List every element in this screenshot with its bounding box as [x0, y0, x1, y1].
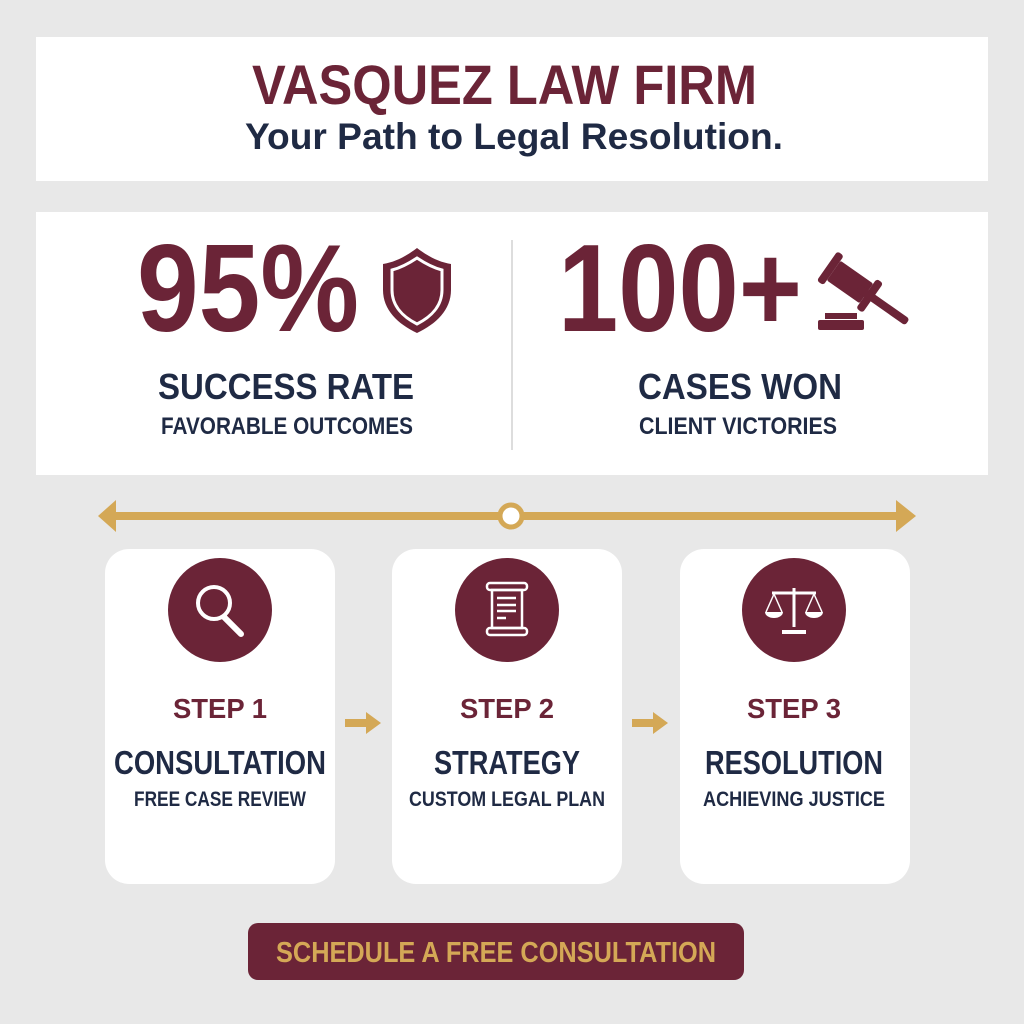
icon: gavel	[817, 251, 918, 337]
card: step 1: STEP 1	[173, 693, 267, 724]
card: step 2: STEP 2	[460, 693, 554, 724]
stat: 100+ cases won	[558, 220, 918, 440]
card: step 1	[105, 549, 335, 884]
arrow: step 2 to 3	[632, 712, 668, 734]
icon: scales	[742, 558, 846, 662]
stat: 100+ cases won: CLIENT VICTORIES	[639, 413, 837, 440]
icon: scroll	[455, 558, 559, 662]
icon: magnifier	[168, 558, 272, 662]
card: step 2: CUSTOM LEGAL PLAN	[409, 788, 605, 811]
icon: shield	[383, 248, 451, 333]
card: step 3	[680, 549, 910, 884]
stats panel	[36, 212, 988, 475]
stat: 95% success rate: FAVORABLE OUTCOMES	[161, 413, 413, 440]
button: CTA: SCHEDULE A FREE CONSULTATION	[276, 937, 716, 969]
stat: 95% success rate	[137, 220, 451, 440]
stat: 100+ cases won: 100+	[558, 220, 802, 358]
card: step 3: ACHIEVING JUSTICE	[703, 788, 885, 811]
subtitle: Your Path to Legal Resolution.	[245, 116, 783, 157]
card: step 2	[392, 549, 622, 884]
header panel	[36, 37, 988, 181]
button: CTA	[248, 923, 744, 980]
arrow: step 1 to 2	[345, 712, 381, 734]
card: step 3: STEP 3	[747, 693, 841, 724]
card: step 3: RESOLUTION	[705, 744, 883, 781]
stat: 95% success rate: 95%	[137, 220, 359, 358]
card: step 2: STRATEGY	[434, 744, 580, 781]
card: step 1: CONSULTATION	[114, 744, 326, 781]
title: VASQUEZ LAW FIRM	[252, 53, 757, 116]
card: step 1: FREE CASE REVIEW	[134, 788, 306, 811]
stat: 100+ cases won: CASES WON	[638, 366, 842, 407]
stat: 95% success rate: SUCCESS RATE	[158, 366, 414, 407]
arrow: timeline	[98, 500, 916, 532]
